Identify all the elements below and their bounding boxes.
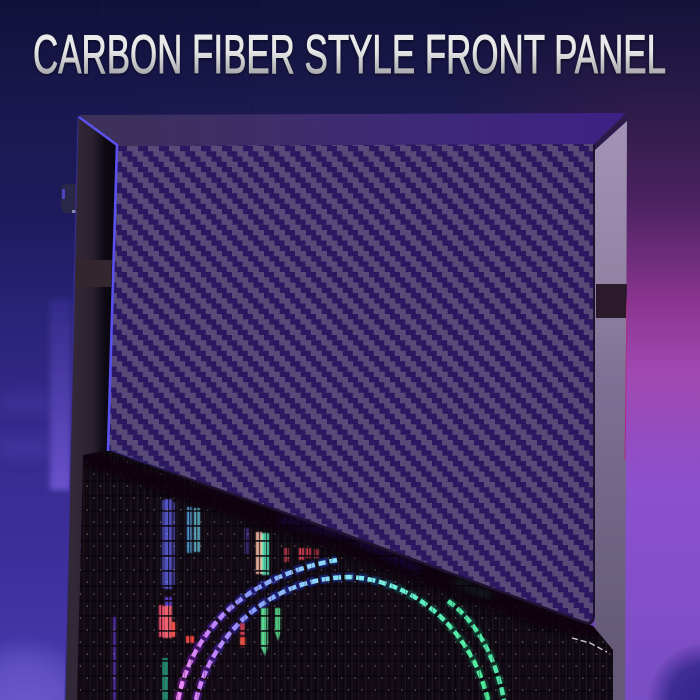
- carbon weave surface: [108, 144, 593, 622]
- panel shadow edge: [108, 145, 595, 625]
- carbon fiber front panel: [79, 117, 595, 625]
- mesh backing: [70, 440, 630, 700]
- outer LED ring: [178, 560, 337, 700]
- blue component light: [161, 499, 176, 589]
- right LED arc: [448, 601, 504, 700]
- brick grille over lights: [70, 440, 630, 700]
- green light bars: [162, 608, 281, 700]
- side knob: [61, 184, 78, 213]
- left side face: [65, 116, 118, 700]
- computer case body: [65, 113, 627, 700]
- red glow left: [159, 597, 246, 647]
- orange and mint light bars: [244, 528, 269, 575]
- highlights on mesh corner: [572, 638, 607, 652]
- purple vertical glow: [112, 615, 116, 700]
- right side face: [595, 119, 627, 700]
- teal component light: [187, 507, 200, 553]
- LED ring glow: [178, 560, 504, 700]
- top bevel face: [79, 113, 626, 146]
- mesh dots: [70, 440, 630, 700]
- red component lights: [284, 548, 319, 562]
- left face band: [75, 260, 112, 287]
- shadow below panel: [83, 448, 600, 640]
- right magenta rim: [625, 300, 627, 460]
- glow under panel: [280, 520, 420, 570]
- left outer blue edge: [65, 116, 78, 700]
- inner LED ring: [196, 577, 488, 700]
- front mesh with fan: [70, 440, 630, 700]
- right top shadow: [594, 117, 627, 150]
- green reflection: [455, 582, 490, 596]
- blue rim light: [79, 117, 117, 451]
- right dark band: [596, 284, 627, 318]
